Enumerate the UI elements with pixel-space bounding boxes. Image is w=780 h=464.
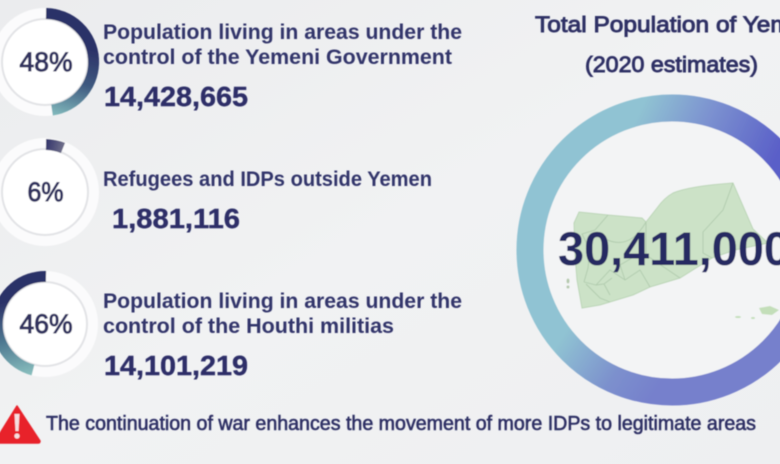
number: refugees: 1,881,116: [112, 203, 240, 234]
panel: Houthi areas: [0, 271, 462, 381]
text: Houthi label: control of the Houthi militias: [103, 315, 394, 338]
panel: total population ring and map: [530, 12, 780, 392]
panel: refugees and IDPs: [0, 138, 432, 246]
donut: 6%: [0, 138, 99, 246]
icon: warning triangle: [0, 406, 40, 443]
ring: total population: [530, 108, 780, 392]
text: government label: [103, 21, 462, 69]
panel: government areas: [0, 8, 462, 116]
number: Houthi population: 14,101,219: [104, 350, 248, 381]
callout: war warning: [0, 406, 756, 443]
text: Houthi label: [103, 290, 462, 338]
text: Houthi label: Population living in areas under the: [103, 290, 462, 313]
title: total population: [535, 12, 780, 77]
text: refugees label: Refugees and IDPs outside Yemen: [103, 168, 432, 191]
map: islands: [566, 278, 779, 319]
number: government population: 14,428,665: [104, 81, 248, 112]
donut: 46%: [0, 271, 98, 377]
donut: 6%: 6%: [28, 177, 64, 207]
donut: 48%: [0, 8, 99, 116]
donut: 46%: 46%: [20, 309, 72, 339]
text: government label: control of the Yemeni Government: [103, 46, 452, 69]
text: warning message: The continuation of war enhances the movement of more IDPs to legitimate areas: [46, 413, 756, 435]
map: Yemen: [566, 183, 779, 319]
text: government label: Population living in areas under the: [103, 21, 462, 44]
title: total population: (2020 estimates): [585, 52, 758, 77]
donut: 48%: 48%: [20, 47, 72, 77]
